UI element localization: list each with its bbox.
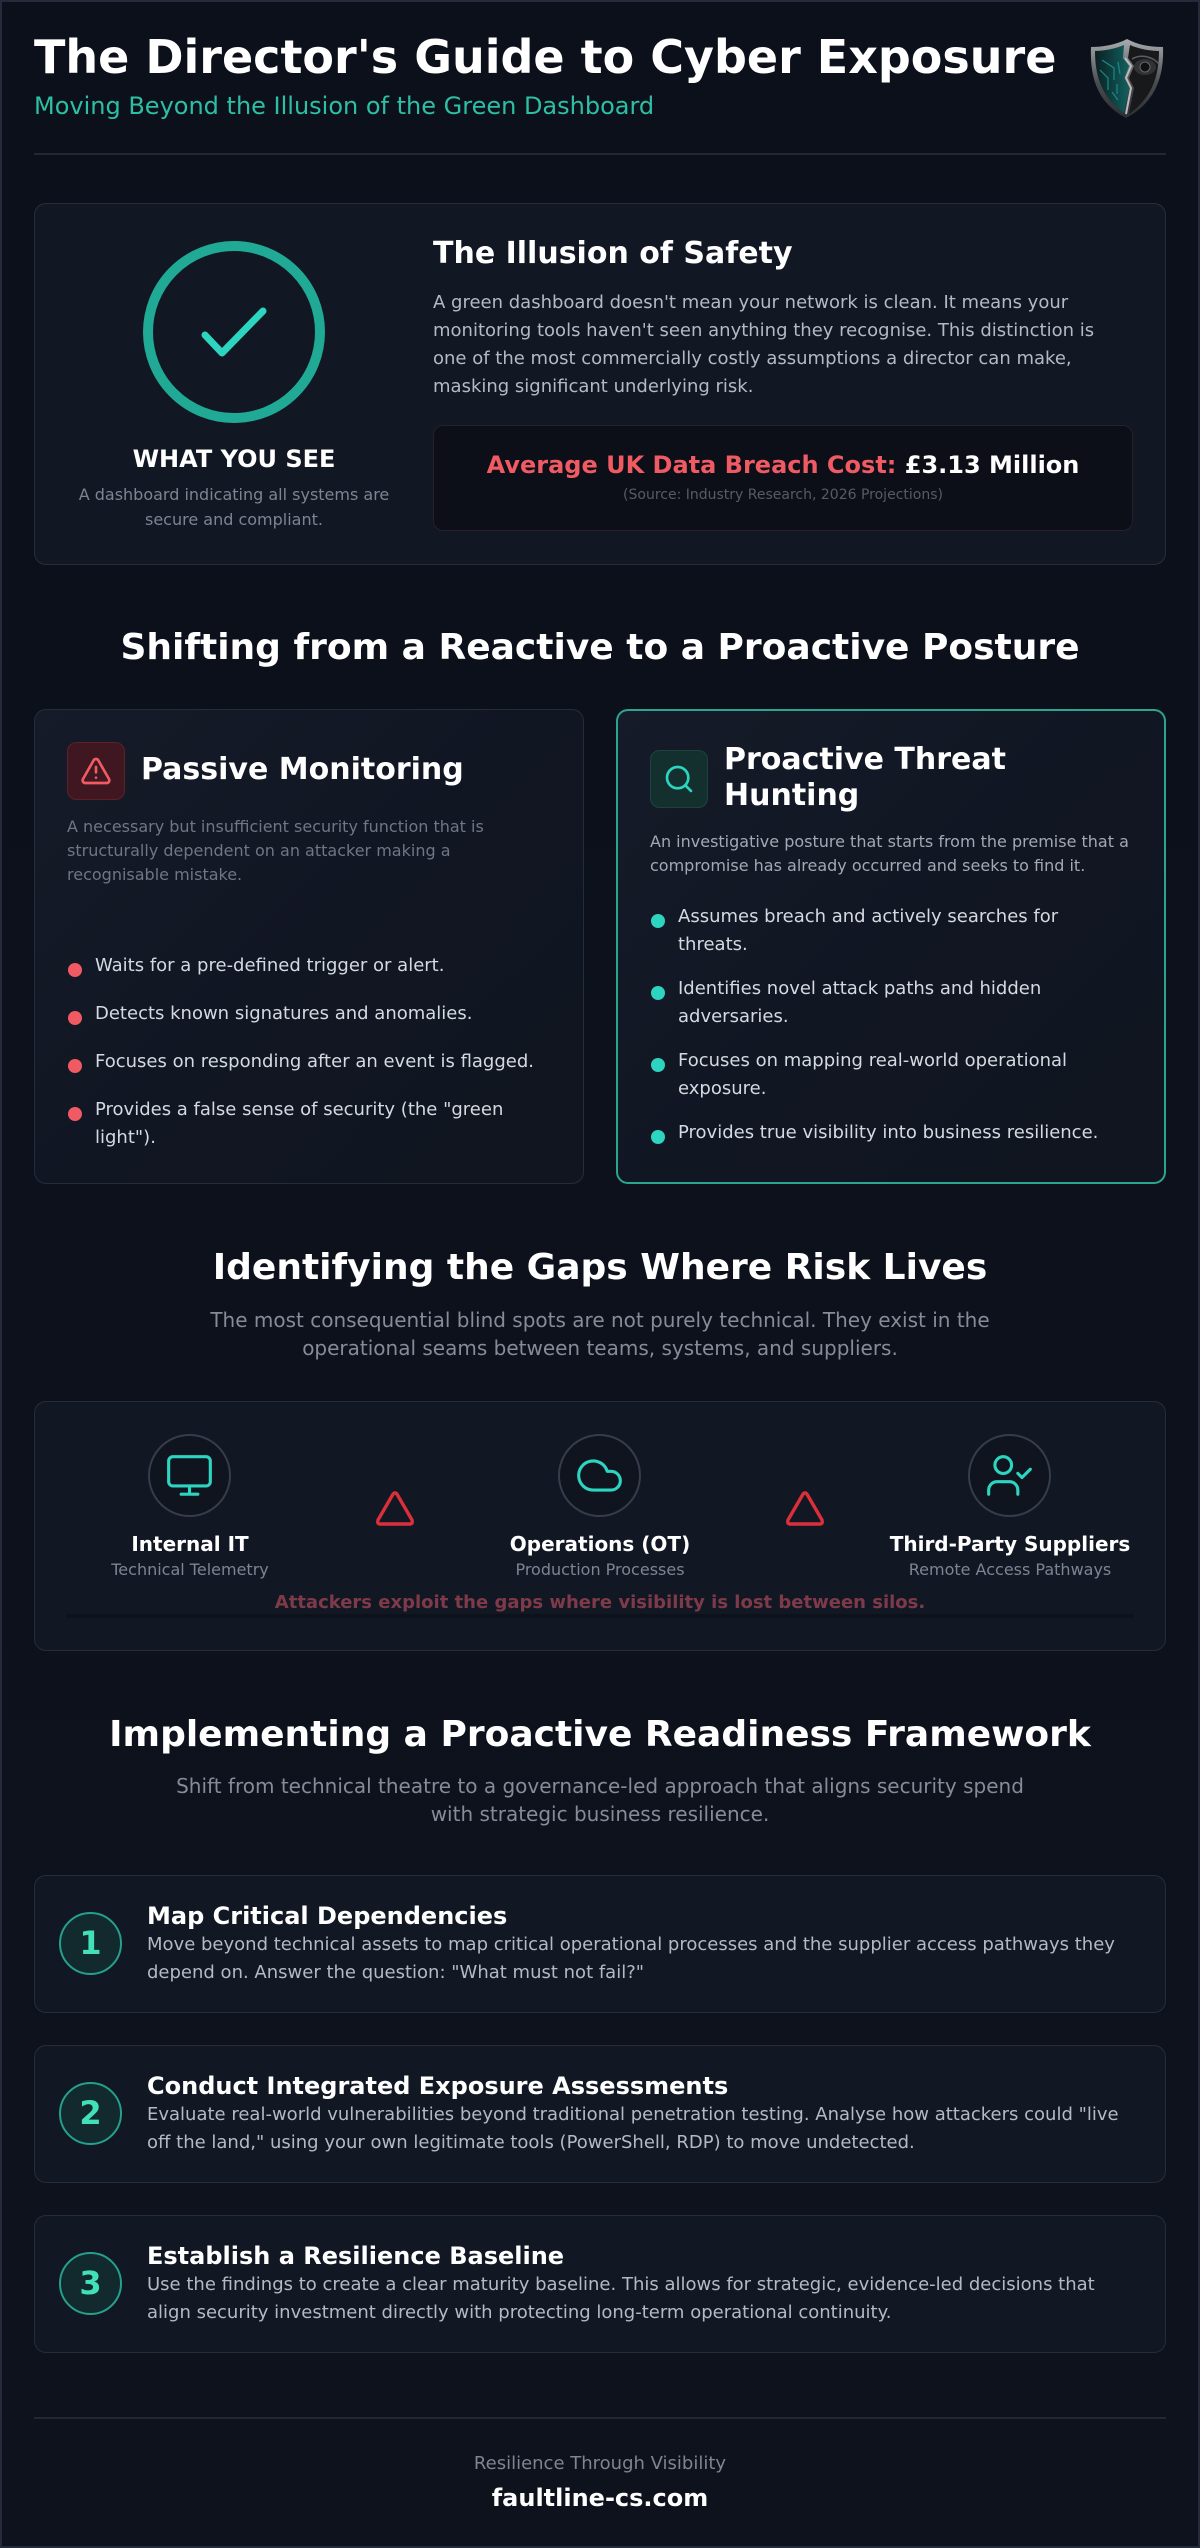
- proactive description: An investigative posture that starts from the premise that a: [650, 832, 1129, 851]
- bullet 4: Provides a false sense of security (the "green: [95, 1099, 503, 1120]
- icon: warning triangle: [67, 742, 125, 800]
- icon: cloud: [558, 1434, 641, 1517]
- step 2 text: Evaluate real-world vulnerabilities beyond traditional penetration testing. Analyse how attackers could "live: [147, 2104, 1119, 2125]
- subtitle: Moving Beyond the Illusion of the Green Dashboard: [34, 92, 654, 120]
- breach cost source: (Source: Industry Research, 2026 Projections): [623, 487, 943, 503]
- passive monitoring heading: Passive Monitoring: [141, 752, 464, 787]
- divider: [34, 153, 1166, 155]
- proactive threat hunting heading: Proactive Threat: [724, 742, 1006, 777]
- icon: gap warning triangle right: [786, 1491, 824, 1526]
- panel: step 3: [34, 2215, 1166, 2353]
- step 1 heading: Map Critical Dependencies: [147, 1902, 507, 1930]
- sublabel: production processes: Production Processes: [515, 1560, 685, 1579]
- label: third-party suppliers: Third-Party Suppliers: [890, 1532, 1130, 1556]
- passive monitoring description: structurally dependent on an attacker making a: [67, 841, 450, 860]
- step 3 text: [147, 2274, 1095, 2323]
- what you see description: A dashboard indicating all systems are: [79, 485, 389, 504]
- bullet 4: Provides true visibility into business resilience.: [678, 1122, 1098, 1143]
- panel: passive monitoring: [34, 709, 584, 1184]
- bullet 3: [651, 1050, 1067, 1099]
- icon: green check circle: [143, 241, 325, 423]
- step number 3: [59, 2252, 122, 2315]
- footer divider: [34, 2417, 1166, 2419]
- passive monitoring description: recognisable mistake.: [67, 865, 242, 884]
- section intro: gaps: [210, 1308, 990, 1360]
- proactive description: compromise has already occurred and seeks to find it.: [650, 856, 1085, 875]
- step 1 text: [147, 1934, 1115, 1983]
- proactive threat hunting heading: Hunting: [724, 778, 859, 813]
- bullet 1: threats.: [678, 934, 748, 955]
- what you see description: [79, 485, 389, 529]
- bullet 4: light").: [95, 1127, 156, 1148]
- silo: operations OT: [510, 1434, 690, 1579]
- section heading: identifying the gaps: Identifying the Gaps Where Risk Lives: [213, 1247, 987, 1288]
- illusion body text: one of the most commercially costly assumptions a director can make,: [433, 348, 1072, 369]
- silo: third-party suppliers: [890, 1434, 1130, 1579]
- bullet 3: Focuses on mapping real-world operational: [678, 1050, 1067, 1071]
- bullet 2: Detects known signatures and anomalies.: [95, 1003, 472, 1024]
- section intro: framework: Shift from technical theatre to a governance-led approach that aligns security spend: [176, 1774, 1024, 1798]
- sublabel: remote access pathways: Remote Access Pathways: [909, 1560, 1111, 1579]
- passive bullet list: [68, 955, 534, 1148]
- step 2 text: [147, 2104, 1119, 2153]
- section intro: gaps: The most consequential blind spots are not purely technical. They exist in the: [210, 1308, 990, 1332]
- step number 1: 1: [79, 1924, 102, 1962]
- illusion body text: A green dashboard doesn't mean your network is clean. It means your: [433, 292, 1068, 313]
- panel: silo gaps diagram: [34, 1401, 1166, 1651]
- bullet 2: Identifies novel attack paths and hidden: [678, 978, 1041, 999]
- step 3 text: Use the findings to create a clear maturity baseline. This allows for strategic, evidence-led decisions that: [147, 2274, 1095, 2295]
- panel: the illusion of safety: [34, 203, 1166, 565]
- bullet 4: [68, 1099, 503, 1148]
- proactive bullet list: [651, 906, 1098, 1144]
- callout: breach cost: [433, 425, 1133, 531]
- what you see description: secure and compliant.: [145, 510, 323, 529]
- section intro: gaps: operational seams between teams, systems, and suppliers.: [302, 1336, 898, 1360]
- footer website: faultline-cs.com: [492, 2484, 708, 2512]
- proactive description: [650, 832, 1129, 875]
- label: operations OT: Operations (OT): [510, 1532, 690, 1556]
- gap warning message: Attackers exploit the gaps where visibility is lost between silos.: [275, 1592, 925, 1613]
- icon: monitor: [148, 1434, 231, 1517]
- illusion heading: The Illusion of Safety: [433, 236, 793, 271]
- section intro: framework: [176, 1774, 1024, 1826]
- step 2 text: off the land," using your own legitimate tools (PowerShell, RDP) to move undetected.: [147, 2132, 915, 2153]
- gap bar: [67, 1614, 1133, 1618]
- panel: step 1: [34, 1875, 1166, 2013]
- step number 2: [59, 2082, 122, 2145]
- illusion body text: masking significant underlying risk.: [433, 376, 753, 397]
- step 3 heading: Establish a Resilience Baseline: [147, 2242, 564, 2270]
- bullet 1: Assumes breach and actively searches for: [678, 906, 1058, 927]
- icon: user check: [968, 1434, 1051, 1517]
- bullet 3: Focuses on responding after an event is flagged.: [95, 1051, 534, 1072]
- proactive threat hunting heading: [724, 742, 1006, 813]
- step 2 heading: Conduct Integrated Exposure Assessments: [147, 2072, 728, 2100]
- title: The Director's Guide to Cyber Exposure: [34, 30, 1056, 84]
- step number 2: 2: [79, 2094, 102, 2132]
- step number 3: 3: [79, 2264, 102, 2302]
- icon: gap warning triangle left: [376, 1491, 414, 1526]
- panel: step 2: [34, 2045, 1166, 2183]
- illusion body text: [433, 292, 1094, 397]
- bullet 1: [651, 906, 1058, 955]
- bullet 1: Waits for a pre-defined trigger or alert.: [95, 955, 444, 976]
- passive monitoring description: [67, 817, 484, 884]
- label: internal IT: Internal IT: [131, 1532, 249, 1556]
- what you see heading: WHAT YOU SEE: [133, 445, 335, 473]
- bullet 3: exposure.: [678, 1078, 766, 1099]
- step number 1: [59, 1912, 122, 1975]
- footer tagline: Resilience Through Visibility: [474, 2453, 726, 2474]
- section heading: readiness framework: Implementing a Proactive Readiness Framework: [109, 1714, 1091, 1755]
- passive monitoring description: A necessary but insufficient security function that is: [67, 817, 484, 836]
- section intro: framework: with strategic business resilience.: [431, 1802, 769, 1826]
- panel: proactive threat hunting: [616, 709, 1166, 1184]
- step 1 text: depend on. Answer the question: "What must not fail?": [147, 1962, 644, 1983]
- icon: split shield logo: [1090, 39, 1164, 118]
- illusion body text: monitoring tools haven't seen anything they recognise. This distinction is: [433, 320, 1094, 341]
- step 3 text: align security investment directly with protecting long-term operational continuity.: [147, 2302, 891, 2323]
- step 1 text: Move beyond technical assets to map critical operational processes and the supplier access pathways they: [147, 1934, 1115, 1955]
- sublabel: technical telemetry: Technical Telemetry: [111, 1560, 269, 1579]
- section heading: shifting posture: Shifting from a Reactive to a Proactive Posture: [120, 627, 1080, 668]
- bullet 2: adversaries.: [678, 1006, 789, 1027]
- icon: magnifier: [650, 750, 708, 808]
- silo: internal IT: [111, 1434, 269, 1579]
- bullet 2: [651, 978, 1041, 1027]
- breach cost figure: Average UK Data Breach Cost: £3.13 Million: [487, 451, 1079, 479]
